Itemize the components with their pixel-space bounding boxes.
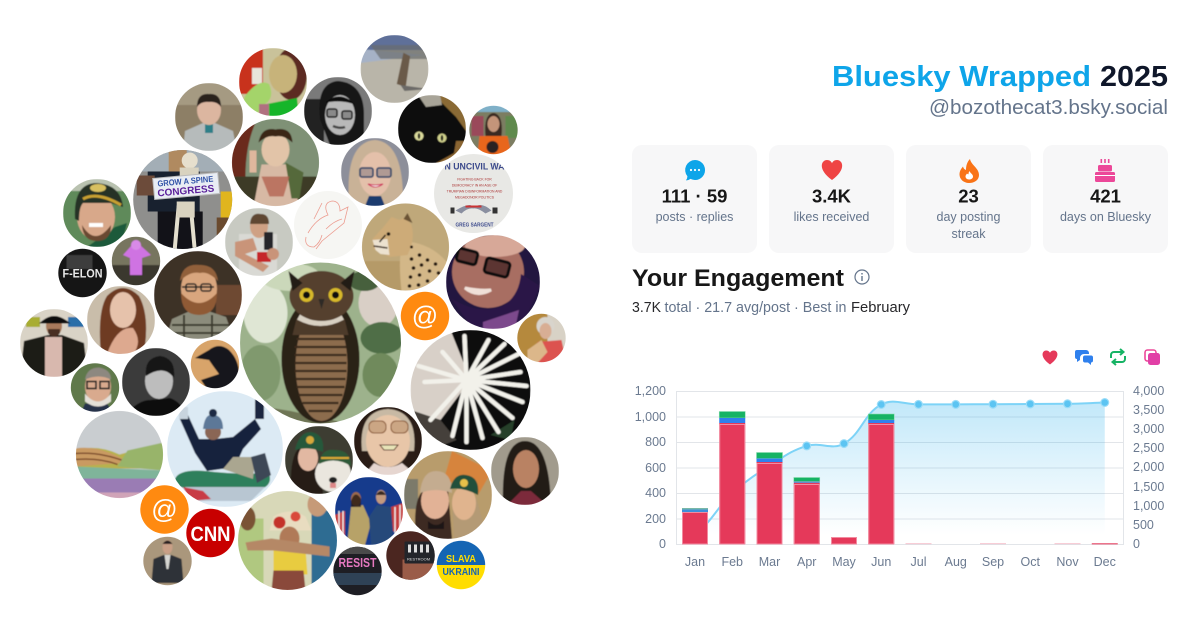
- right axis labels: 3,000: [1133, 422, 1164, 436]
- icon: birthday cake: [1095, 159, 1115, 182]
- right axis labels: 1,000: [1133, 499, 1164, 513]
- month axis labels: Mar: [759, 555, 780, 569]
- handle: @bozothecat3.bsky.social: [929, 96, 1168, 119]
- stat label: days on Bluesky: [1060, 210, 1152, 224]
- avatar: blonde woman with blue glasses: [341, 138, 409, 206]
- engagement summary text: total · 21.7 avg/post · Best in: [664, 300, 846, 316]
- avatar: An Uncivil War book cover: GREG SARGENT: [456, 222, 494, 228]
- avatar: RESIST: RESIST: [338, 556, 377, 570]
- left axis labels: 800: [645, 435, 666, 449]
- panel: posts and replies stat card: [632, 145, 757, 253]
- bars: May: [831, 537, 857, 544]
- avatar: black cat: [398, 95, 466, 163]
- avatar: F-ELON: [58, 248, 108, 298]
- avatar: painted regency lady: [232, 118, 320, 206]
- avatar: two women in Packers hats: [404, 451, 492, 539]
- avatar: Slava Ukraini: [436, 540, 486, 590]
- avatar: restroom sign on brick wall: RESTROOM: [407, 556, 430, 562]
- month axis labels: May: [832, 555, 857, 569]
- stat label line two: streak: [951, 227, 986, 241]
- avatar: woman in Packers hat with white dog: [285, 426, 353, 494]
- avatar: man in dark suit: [142, 536, 192, 586]
- left axis labels: [635, 384, 666, 551]
- avatar: black and white woman with glasses: [304, 77, 372, 145]
- avatar: An Uncivil War book cover: [434, 154, 514, 234]
- month axis labels: Nov: [1056, 555, 1079, 569]
- icon: info: [855, 270, 869, 284]
- bars: Jan: [682, 508, 708, 544]
- avatar: pink figure: [111, 236, 161, 286]
- avatar: woman with long auburn hair: [87, 286, 155, 354]
- month axis labels: Jan: [685, 555, 705, 569]
- avatar: smiling man with glasses, purple tint: [446, 235, 540, 329]
- right axis labels: 1,500: [1133, 480, 1164, 494]
- bars: Apr: [794, 478, 820, 544]
- avatar: An Uncivil War book cover: DEMOCRACY IN AN AGE OF: [452, 184, 497, 188]
- left axis labels: 0: [659, 537, 666, 551]
- avatar: skeleton protest sign: CONGRESS: [157, 184, 215, 199]
- right axis labels: 2,500: [1133, 441, 1164, 455]
- title: Bluesky Wrapped: [832, 61, 1091, 93]
- panel: avatar bubble cluster: [20, 35, 566, 596]
- month axis labels: Feb: [721, 555, 743, 569]
- right axis labels: 500: [1133, 518, 1154, 532]
- avatar: man in Packers cap: [63, 179, 131, 247]
- left axis labels: 1,000: [635, 410, 666, 424]
- heading: Your Engagement: Your Engagement: [632, 265, 844, 292]
- chart legend icons: [1043, 349, 1160, 365]
- avatar: older person close-up with glasses: [354, 407, 422, 475]
- left axis labels: 200: [645, 512, 666, 526]
- month axis labels: Sep: [982, 555, 1004, 569]
- avatar: man taking mirror selfie: [225, 208, 293, 276]
- stat value: 421: [1090, 186, 1121, 206]
- avatar: older man with glasses and white beard: [70, 362, 120, 412]
- bars: small months: [906, 543, 1118, 544]
- avatar: restroom sign on brick wall: [386, 530, 436, 580]
- avatar: smiling man in grey sweater: [175, 83, 243, 151]
- avatar: An Uncivil War book cover: MEGADONOR POLITICS: [455, 196, 495, 200]
- month axis labels: Dec: [1094, 555, 1116, 569]
- stat value: 3.4K: [812, 186, 852, 206]
- engagement summary text: 3.7K: [632, 300, 661, 316]
- avatar: Slava Ukraini: SLAVA: [446, 553, 476, 565]
- panel: days on Bluesky stat card: [1043, 145, 1168, 253]
- avatar: colored pencil landscape drawing: [76, 410, 164, 498]
- stat label: posts · replies: [656, 210, 733, 224]
- avatar: An Uncivil War book cover: FIGHTING BACK FOR: [457, 178, 492, 182]
- panel: likes stat card: [769, 145, 894, 253]
- month axis labels: Jun: [871, 555, 891, 569]
- icon: replies legend bubbles: [1075, 350, 1093, 365]
- avatar: CNN logo: [186, 508, 236, 558]
- avatar: An Uncivil War book cover: N UNCIVIL WA: [444, 162, 505, 172]
- title: 2025: [1100, 61, 1168, 93]
- icon: orange at-sign avatar: @: [412, 300, 438, 330]
- avatar: man with black cap and leather jacket: [20, 309, 88, 377]
- avatar: CNN logo: CNN: [190, 523, 230, 546]
- stat value: 23: [958, 186, 979, 206]
- cumulative line: [695, 402, 1105, 533]
- icon: heart: [822, 160, 842, 180]
- avatar: white night-blooming flower: [410, 330, 530, 450]
- avatar: great horned owl: [240, 262, 404, 424]
- line data points: [803, 399, 1109, 450]
- right axis labels: 0: [1133, 537, 1140, 551]
- month axis labels: Apr: [797, 555, 816, 569]
- avatar: skeleton protest sign: GROW A SPINE: [157, 174, 214, 188]
- avatar: person on snow tube: [167, 391, 283, 507]
- avatar: RESIST: [332, 546, 382, 596]
- avatar: colorful movie dance scene: [238, 490, 338, 590]
- icon: likes legend heart: [1043, 350, 1057, 364]
- avatar: skeleton protest sign: [133, 150, 233, 250]
- stat label: day posting: [937, 210, 1001, 224]
- left axis labels: 400: [645, 486, 666, 500]
- right axis labels: 4,000: [1133, 384, 1164, 398]
- month axis labels: Jul: [911, 555, 926, 569]
- avatar: An Uncivil War book cover: TRUMPIAN DISINFORMATION AND: [447, 190, 503, 194]
- icon: quotes legend squares: [1145, 350, 1160, 365]
- right axis labels: [1133, 384, 1164, 551]
- avatar: two politicians shaking hands with flags: [335, 477, 403, 545]
- stat label: likes received: [794, 210, 869, 224]
- icon: second orange at-sign avatar: @: [151, 494, 178, 524]
- avatar: beach with wooden posts: [360, 35, 428, 103]
- icon: flame: [960, 159, 979, 183]
- avatar: crow: [190, 339, 240, 389]
- avatar: Slava Ukraini: UKRAINI: [442, 567, 480, 578]
- left axis labels: 600: [645, 461, 666, 475]
- month axis labels: Oct: [1021, 555, 1040, 569]
- stat value: 111 · 59: [662, 186, 727, 206]
- right axis labels: 3,500: [1133, 403, 1164, 417]
- chart: monthly engagement bars with cumulative line: [635, 384, 1164, 569]
- avatar: woman with long dark hair: [491, 437, 559, 505]
- bars: Mar: [756, 452, 782, 544]
- chart grid: [676, 391, 1124, 545]
- avatar: black and white portrait of man: [122, 348, 190, 416]
- month axis labels: Aug: [945, 555, 967, 569]
- icon: orange at-sign avatar: [400, 291, 450, 341]
- month axis labels: [685, 555, 1116, 569]
- bars: Jun: [868, 414, 894, 544]
- avatar: F-ELON: F-ELON: [62, 266, 102, 280]
- avatar: red line sketch: [294, 191, 362, 259]
- icon: second orange at-sign avatar: [140, 484, 190, 534]
- cumulative area fill: [695, 402, 1105, 544]
- panel: posting streak stat card: [906, 145, 1031, 253]
- avatar: older woman with cat: [516, 313, 566, 363]
- icon: reposts legend arrows: [1111, 349, 1125, 365]
- avatar: person in orange shirt at rally: [468, 105, 518, 155]
- icon: chat bubble: [685, 160, 705, 180]
- right axis labels: 2,000: [1133, 460, 1164, 474]
- avatar: bearded man with glasses: [154, 251, 242, 339]
- left axis labels: 1,200: [635, 384, 666, 398]
- avatar: cheetah: [362, 203, 450, 291]
- bars: Feb: [719, 412, 745, 544]
- avatar: woman with green tint: [239, 48, 307, 116]
- engagement summary text: [632, 300, 911, 316]
- engagement summary text: February: [851, 300, 911, 316]
